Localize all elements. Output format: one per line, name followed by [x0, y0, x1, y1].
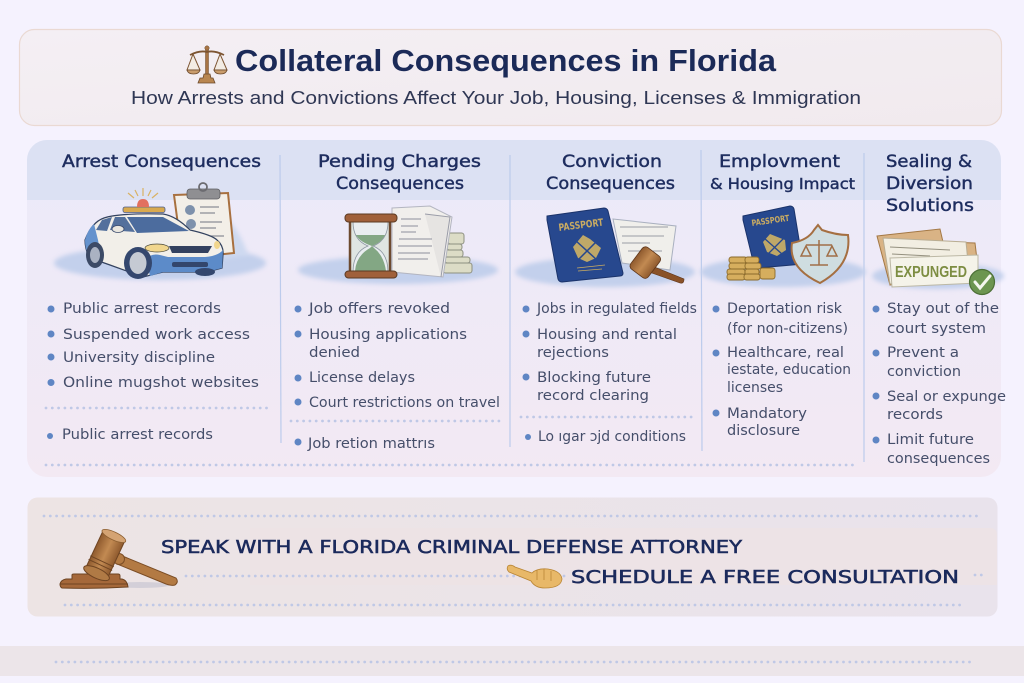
bullet list: conviction: Lo ıgar ɔjd conditions — [538, 429, 686, 445]
icon: hourglass, papers and stack — [298, 206, 498, 284]
heading: employment — [710, 152, 855, 193]
heading: conviction: Consequences — [546, 174, 675, 194]
column: pending charges consequences — [291, 152, 503, 452]
bullet list: sealing: Seal or expunge — [887, 389, 1006, 405]
heading: employment: & Housing Impact — [710, 175, 855, 193]
bullet list: pending charges: Court restrictions on travel — [309, 395, 500, 411]
heading: sealing: Sealing & — [886, 152, 972, 172]
subtitle: How Arrests and Convictions Affect Your Job, Housing, Licenses & Immigration — [131, 88, 861, 108]
icon: expunged folder with check: EXPUNGED — [895, 264, 967, 281]
bullet list: pending charges: License delays — [309, 370, 415, 386]
bullet list: pending charges: Job offers revoked — [308, 301, 450, 317]
icon: expunged folder with check — [872, 229, 1004, 294]
icon: scales of justice — [187, 46, 227, 83]
heading: pending charges: Pending Charges — [318, 152, 481, 172]
bullet list: employment: (for non-citizens) — [727, 321, 848, 337]
heading: sealing: Diversion — [886, 174, 973, 194]
bullet list: employment — [712, 301, 851, 439]
bullet list: arrest: Public arrest records — [63, 301, 221, 317]
icon: gavel — [60, 526, 177, 588]
bullet list: conviction: Blocking future — [537, 370, 651, 386]
bullet list: employment: iestate, education — [727, 362, 851, 378]
bullet list: sealing: Stay out of the — [887, 301, 999, 317]
bullet list: conviction — [521, 301, 697, 445]
heading: pending charges: Consequences — [336, 174, 464, 194]
icon: pointing hand — [507, 565, 562, 588]
bullet list: arrest: University discipline — [63, 350, 215, 366]
bullet list: sealing: conviction — [887, 364, 961, 380]
heading: sealing: Solutions — [886, 196, 974, 216]
bullet list: employment: Deportation risk — [727, 301, 843, 317]
bullet list: sealing — [872, 301, 1006, 467]
title text: Collateral Consequences in Florida — [235, 43, 777, 78]
main panel: consequence columns — [27, 140, 1006, 477]
call to action panel — [28, 498, 998, 616]
bullet list: employment: Mandatory — [727, 406, 807, 422]
bullet list: conviction: record clearing — [537, 388, 649, 404]
bullet list: arrest: Public arrest records — [62, 427, 213, 443]
title panel — [20, 30, 1002, 126]
bullet list: sealing: Prevent a — [887, 345, 959, 361]
bullet list: sealing: consequences — [887, 451, 990, 467]
bullet list: conviction: rejections — [537, 345, 609, 361]
heading: arrest consequences: Arrest Consequences — [62, 152, 261, 172]
column: employment and housing impact — [700, 152, 866, 439]
bullet list: sealing: Limit future — [887, 432, 974, 448]
cta button text: SCHEDULE A FREE CONSULTATION — [571, 568, 959, 588]
icon: passport, coins and shield: PASSPORT — [751, 214, 790, 229]
bullet list: pending charges: Job retion mattrıs — [307, 436, 435, 452]
icon: passport, coins and shield — [700, 206, 866, 287]
bullet list: arrest — [46, 301, 271, 443]
bullet list: pending charges — [291, 301, 503, 452]
bullet list: arrest: Suspended work access — [63, 327, 250, 343]
bullet list: conviction: Jobs in regulated fields — [536, 301, 697, 317]
bullet list: sealing: court system — [887, 321, 986, 337]
cta headline: SPEAK WITH A FLORIDA CRIMINAL DEFENSE ATTORNEY — [161, 538, 742, 558]
heading: conviction — [546, 152, 675, 194]
bullet list: employment: Healthcare, real — [727, 345, 844, 361]
column: conviction consequences — [515, 152, 697, 445]
heading: conviction: Conviction — [562, 152, 662, 172]
heading: pending charges — [318, 152, 481, 194]
bullet list: arrest: Online mugshot websites — [63, 375, 259, 391]
column: arrest consequences — [46, 152, 271, 443]
column: sealing and diversion solutions — [872, 152, 1006, 467]
heading: sealing — [886, 152, 974, 216]
bullet list: employment: disclosure — [727, 423, 800, 439]
bullet list: conviction: Housing and rental — [537, 327, 677, 343]
bullet list: sealing: records — [887, 407, 943, 423]
bullet list: pending charges: denied — [309, 345, 360, 361]
icon: passport, document and gavel: PASSPORT — [558, 218, 604, 234]
icon: police car and clipboard — [54, 183, 266, 280]
bullet list: employment: licenses — [727, 380, 783, 396]
icon: passport, document and gavel — [515, 208, 695, 287]
footer strip — [0, 646, 1024, 676]
heading: employment: Emplovment — [719, 152, 840, 172]
bullet list: pending charges: Housing applications — [309, 327, 467, 343]
